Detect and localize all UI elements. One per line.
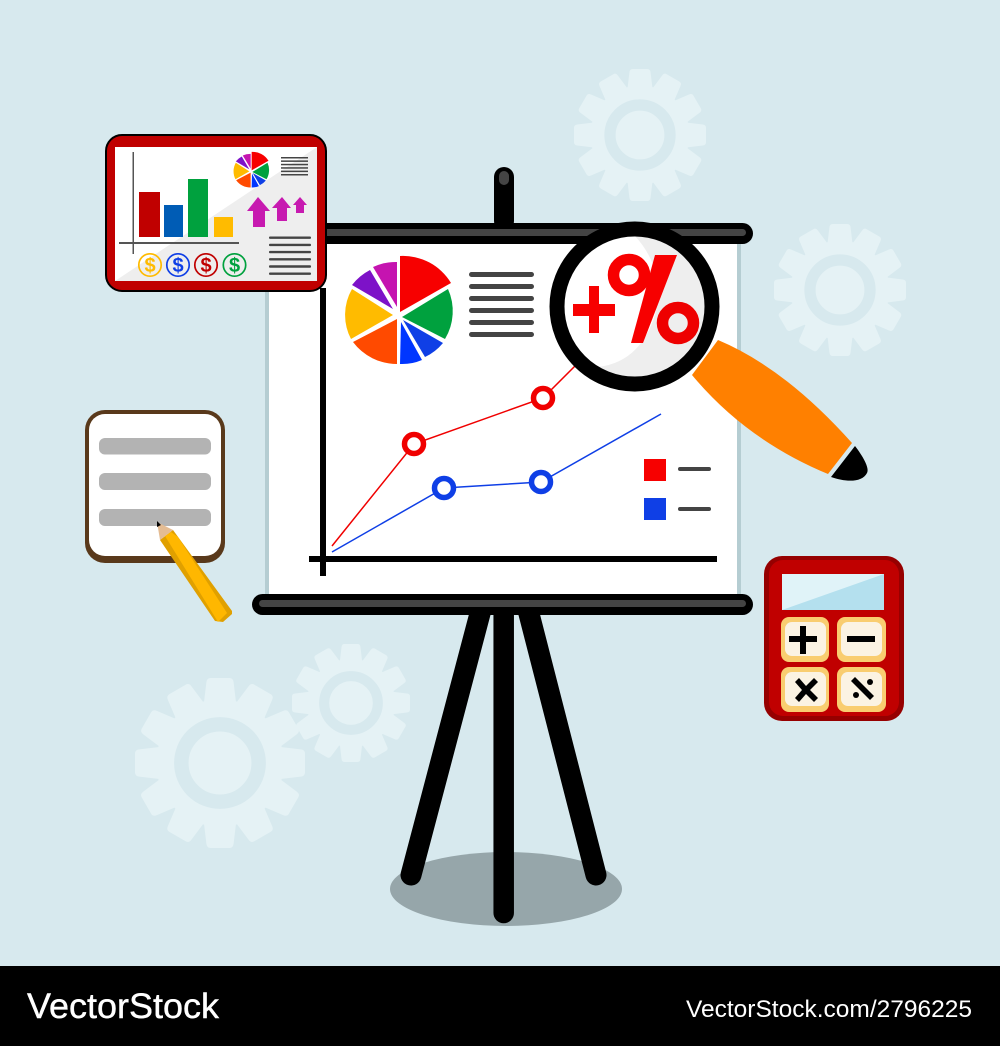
handle tip — [831, 446, 868, 481]
bars — [139, 179, 233, 237]
decorative gears — [135, 69, 906, 848]
mini lines bottom — [269, 236, 311, 275]
dollar coins: $ — [144, 255, 156, 277]
key symbols — [789, 626, 875, 702]
frame — [106, 135, 326, 291]
floor shadow — [390, 852, 622, 926]
gear: bottom left small — [292, 644, 410, 762]
dollar coins — [139, 254, 246, 277]
gear: bottom left large — [135, 678, 305, 848]
top peg — [494, 167, 514, 231]
magnifying glass — [557, 229, 868, 481]
line chart — [309, 288, 717, 576]
board text lines — [469, 272, 534, 337]
gear: right — [774, 224, 906, 356]
keys — [781, 617, 886, 712]
dollar coins: $ — [172, 255, 184, 277]
dollar coins: $ — [200, 255, 212, 277]
mini pie — [234, 152, 269, 188]
blue series — [332, 414, 661, 552]
footer logo: VectorStock — [27, 986, 219, 1026]
legend — [644, 459, 711, 520]
notepad — [85, 410, 232, 622]
footer url: VectorStock.com/2796225 — [686, 996, 972, 1023]
screen — [782, 574, 884, 610]
top bar — [252, 223, 753, 244]
plus percent symbol — [573, 255, 694, 343]
tablet axes — [119, 152, 239, 254]
handle — [692, 340, 852, 474]
gear: top centre — [574, 69, 706, 201]
arrows — [247, 197, 307, 227]
mini lines top — [281, 157, 308, 176]
presentation board — [265, 240, 741, 598]
dollar coins: $ — [229, 255, 240, 277]
red series — [332, 361, 580, 546]
calculator — [764, 556, 904, 721]
lens — [564, 236, 706, 378]
easel legs — [411, 606, 596, 913]
tablet panel — [106, 135, 326, 291]
pencil — [157, 521, 232, 622]
footer bar — [0, 966, 1000, 1046]
note lines — [99, 438, 211, 526]
rim — [557, 229, 712, 384]
board pie chart — [345, 256, 453, 364]
bottom bar — [252, 594, 753, 615]
axes — [309, 288, 717, 576]
